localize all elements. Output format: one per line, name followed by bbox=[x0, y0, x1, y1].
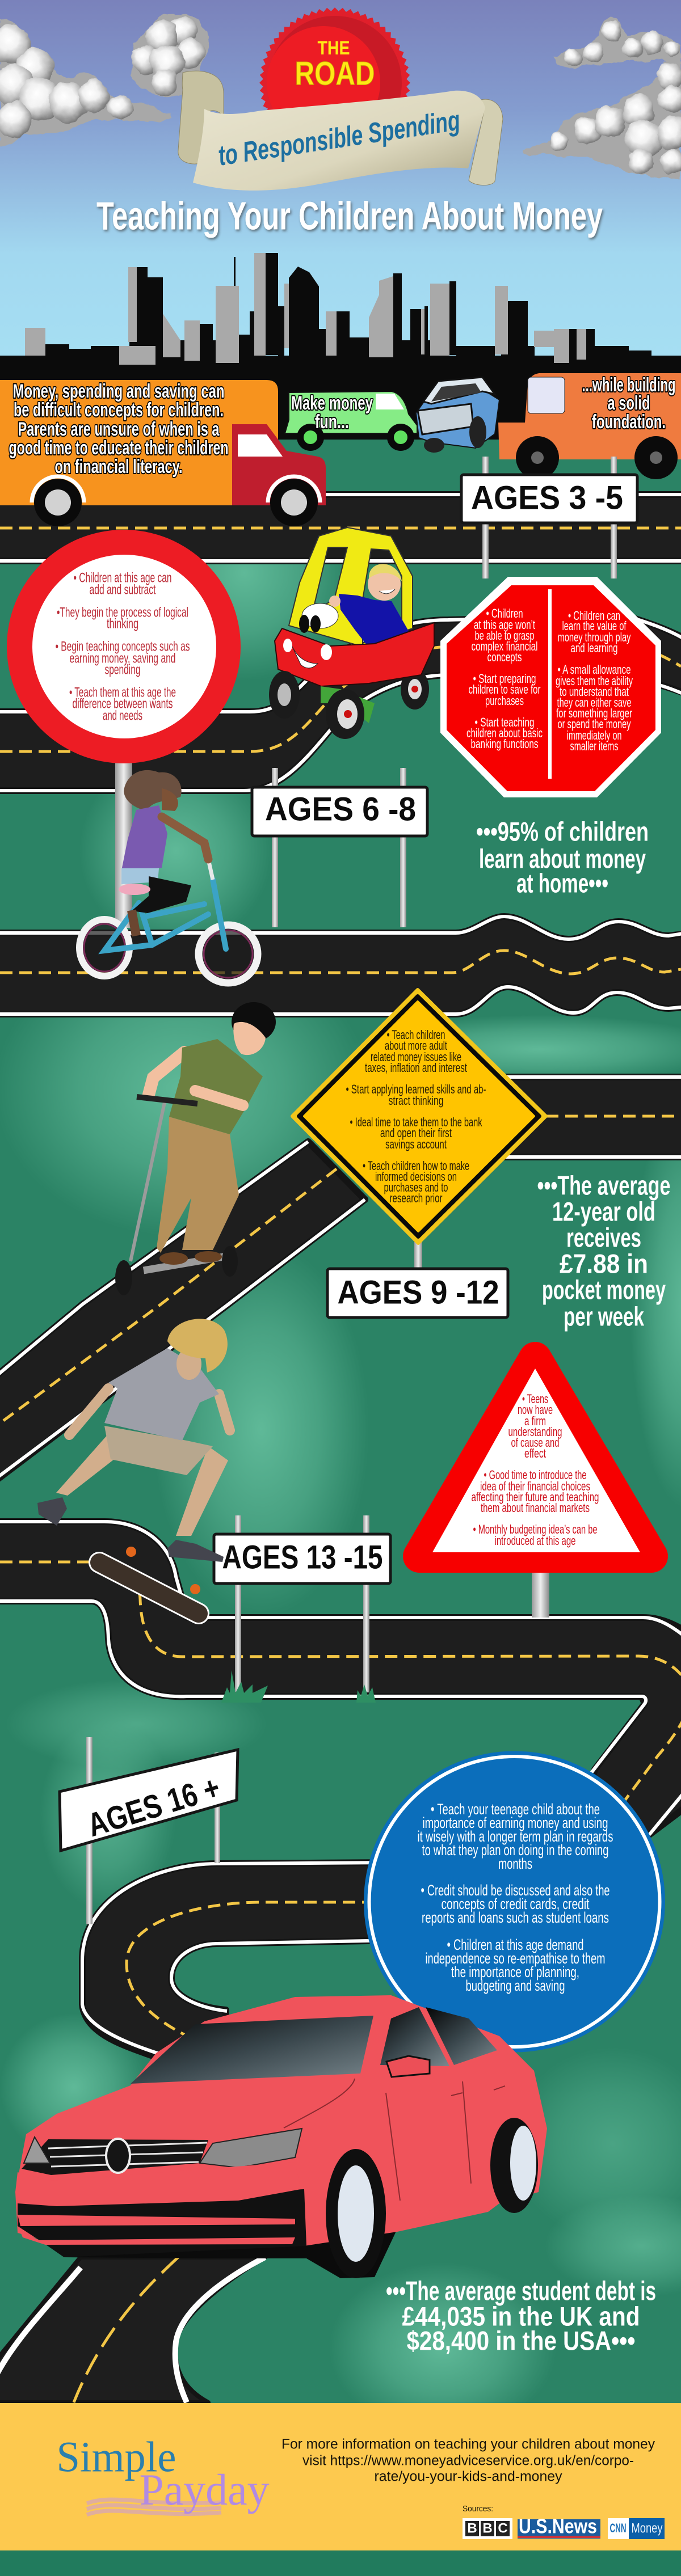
right headlight bbox=[200, 2129, 302, 2168]
divider bbox=[548, 589, 552, 779]
wheel: front right bbox=[326, 689, 364, 739]
octagon left text: complex financial bbox=[471, 639, 538, 653]
octagon left text bbox=[466, 606, 543, 751]
diamond text: purchases and to bbox=[384, 1180, 448, 1194]
road 7: hairpin bbox=[82, 1863, 397, 2076]
road 2: s-curve to right bbox=[0, 615, 681, 791]
wing mirror bbox=[386, 2056, 430, 2077]
word: THE: THE bbox=[318, 37, 350, 59]
logo waves bbox=[87, 2499, 221, 2515]
circle text: spending bbox=[104, 662, 141, 677]
sign board bbox=[214, 1534, 390, 1583]
van window bbox=[528, 377, 565, 413]
circle sign: ages 3-5 bbox=[7, 530, 241, 928]
boy arm bbox=[149, 1052, 184, 1095]
diamond text: stract thinking bbox=[388, 1093, 444, 1108]
circle text: add and subtract bbox=[90, 582, 156, 597]
grille bars bbox=[48, 2143, 207, 2167]
rear rim bbox=[510, 2126, 536, 2201]
triangle text: • Teens bbox=[522, 1392, 548, 1406]
octagon right text: and learning bbox=[571, 641, 617, 655]
circle text: difference between wants bbox=[73, 696, 173, 711]
girl arm bbox=[162, 817, 208, 859]
footer info text: rate/you-your-kids-and-money bbox=[375, 2469, 562, 2485]
road 1: top straight bbox=[0, 495, 681, 561]
child body bbox=[339, 594, 413, 648]
circle text: • Children at this age can bbox=[74, 570, 171, 585]
wheel: front left bbox=[269, 671, 300, 719]
octagon red bbox=[447, 585, 655, 791]
child head bbox=[368, 564, 402, 601]
grille band bbox=[22, 2139, 208, 2175]
sign: ages 13-15 bbox=[214, 1515, 390, 1703]
seal badge bbox=[259, 7, 410, 158]
triangle red bbox=[419, 1358, 651, 1556]
circle text: thinking bbox=[107, 616, 138, 631]
diamond text: • Ideal time to take them to the bank bbox=[350, 1115, 482, 1129]
logo word: Payday: Payday bbox=[140, 2465, 269, 2514]
scooter handlebar bbox=[137, 1097, 197, 1104]
scooter pole and deck bbox=[131, 1100, 230, 1270]
boy face bbox=[176, 1348, 201, 1380]
boy pants bbox=[157, 1117, 239, 1253]
octagon left text: children about basic bbox=[466, 726, 543, 740]
front tyre bbox=[326, 2149, 386, 2278]
side windows bbox=[380, 2007, 497, 2066]
cloud base shapes bbox=[0, 14, 681, 179]
sky bbox=[0, 0, 681, 363]
logo: BBC: C bbox=[498, 2520, 508, 2536]
sign label: AGES 9 -12 bbox=[337, 1274, 499, 1311]
logo: CNN Money: CNN bbox=[609, 2521, 627, 2535]
diamond yellow bbox=[304, 1002, 534, 1231]
diamond text: about more adult bbox=[385, 1038, 447, 1053]
diamond text bbox=[346, 1028, 486, 1205]
footer band bbox=[0, 2403, 681, 2550]
octagon left text: • Children bbox=[486, 606, 523, 620]
diamond text: taxes, inflation and interest bbox=[365, 1061, 467, 1075]
white disc bbox=[32, 555, 216, 738]
post bbox=[115, 760, 132, 928]
diamond text: informed decisions on bbox=[375, 1169, 457, 1184]
sign: ages 6-8 bbox=[252, 768, 427, 927]
rear tyre bbox=[490, 2118, 538, 2213]
girl lower leg bbox=[132, 910, 136, 936]
octagon left text: • Start teaching bbox=[474, 715, 535, 729]
stat: pocket money: per week bbox=[564, 1301, 645, 1331]
boy shirt bbox=[104, 1348, 219, 1441]
octagon left text: children to save for bbox=[469, 682, 541, 696]
bumper upper body bbox=[15, 2162, 301, 2206]
boy face bbox=[233, 1022, 266, 1055]
skyline gray towers bbox=[25, 253, 586, 365]
scroll left roll bbox=[178, 71, 224, 164]
stat: 95 percent: at home••• bbox=[516, 868, 608, 898]
diamond text: • Start applying learned skills and ab- bbox=[346, 1082, 486, 1096]
left headlight bbox=[24, 2137, 50, 2163]
logo: BBC bbox=[463, 2518, 512, 2539]
blue circle text: budgeting and saving bbox=[465, 1977, 565, 1994]
blue circle text: • Teach your teenage child about the bbox=[431, 1801, 600, 1818]
white ring bbox=[369, 1756, 659, 2047]
van wheels bbox=[297, 424, 414, 451]
triangle white bbox=[432, 1369, 640, 1552]
octagon right text: immediately on bbox=[566, 728, 622, 742]
diamond text: related money issues like bbox=[371, 1050, 461, 1064]
scroll subtitle: to Responsible Spending bbox=[216, 104, 462, 172]
girl skirt bbox=[121, 868, 159, 884]
stat: student debt: $28,400 in the USA••• bbox=[406, 2325, 636, 2355]
footer info text: visit https://www.moneyadviceservice.org.uk/en/corpo- bbox=[302, 2453, 634, 2469]
sign board bbox=[327, 1269, 508, 1317]
stat: 95 percent bbox=[476, 816, 649, 898]
van body bbox=[285, 391, 417, 433]
diamond black bbox=[299, 996, 540, 1237]
octagon right text: learn the value of bbox=[562, 619, 627, 633]
octagon right text: • A small allowance bbox=[557, 662, 631, 677]
triangle text: of cause and bbox=[511, 1435, 560, 1450]
diamond outer bbox=[292, 990, 546, 1243]
triangle text: understanding bbox=[508, 1425, 562, 1439]
blue circle text: concepts of credit cards, credit bbox=[442, 1895, 590, 1912]
truck box bbox=[0, 380, 278, 505]
sign label: AGES 6 -8 bbox=[265, 791, 416, 827]
octagon right text: smaller items bbox=[570, 739, 619, 753]
posts bbox=[86, 1737, 220, 1924]
circle text: earning money, saving and bbox=[69, 651, 176, 666]
triangle text: effect bbox=[524, 1446, 547, 1460]
diamond text: • Teach children bbox=[387, 1028, 445, 1042]
truck text: on financial literacy. bbox=[54, 456, 183, 478]
triangle text: them about financial markets bbox=[481, 1501, 590, 1515]
footer info text bbox=[281, 2436, 655, 2485]
diamond sign: ages 9-12 bbox=[292, 990, 546, 1270]
truck window bbox=[238, 434, 283, 457]
vehicle: orange van with text bbox=[498, 373, 681, 479]
triangle text: • Good time to introduce the bbox=[484, 1468, 587, 1482]
road 3: wavy straight bbox=[0, 917, 681, 1014]
blue circle text: • Children at this age demand bbox=[447, 1936, 583, 1953]
triangle text: introduced at this age bbox=[495, 1534, 575, 1548]
logo: CNN Money bbox=[608, 2518, 665, 2539]
circle text bbox=[56, 570, 190, 723]
triangle text: affecting their future and teaching bbox=[471, 1490, 599, 1504]
octagon right text: they can either save bbox=[557, 695, 631, 710]
van text: a solid bbox=[607, 392, 650, 414]
body creases bbox=[284, 2079, 505, 2201]
posts bbox=[482, 457, 617, 578]
logo: US News: U.S.News bbox=[519, 2515, 597, 2538]
blue circle text bbox=[418, 1801, 613, 1994]
car body bbox=[15, 1995, 547, 2246]
van wheels bbox=[516, 436, 678, 479]
truck text: good time to educate their children bbox=[9, 437, 228, 459]
sign: ages 9-12 bbox=[327, 1269, 508, 1317]
red ring bbox=[7, 530, 241, 763]
front bumper bbox=[18, 2189, 306, 2257]
octagon left text: banking functions bbox=[471, 737, 538, 751]
scroll right roll bbox=[469, 99, 503, 185]
octagon right text bbox=[556, 609, 633, 753]
truck text: be difficult concepts for children. bbox=[14, 399, 224, 421]
octagon right text: to understand that bbox=[560, 685, 629, 699]
city skyline bbox=[0, 253, 681, 440]
circle text: • Teach them at this age the bbox=[69, 685, 176, 700]
truck text: Money, spending and saving can bbox=[12, 381, 225, 402]
van text bbox=[582, 374, 675, 433]
bike rear wheel bbox=[79, 919, 129, 976]
stat: pocket money: receives bbox=[566, 1222, 641, 1252]
octagon sign: ages 3-5 bbox=[440, 577, 661, 797]
front rim bbox=[338, 2165, 374, 2262]
boy legs bbox=[56, 1429, 228, 1536]
road 6: lower s-bend bbox=[0, 1522, 681, 1872]
truck grille bbox=[418, 404, 473, 434]
vehicle: orange truck with text bbox=[0, 380, 326, 526]
word: ROAD: ROAD bbox=[295, 55, 375, 92]
sign: ages 16+ bbox=[60, 1737, 238, 1924]
footer panel bbox=[0, 2403, 681, 2576]
sign board bbox=[252, 787, 427, 836]
posts bbox=[272, 768, 406, 927]
sign label: AGES 3 -5 bbox=[471, 479, 623, 516]
scroll body bbox=[193, 91, 485, 191]
child hand bbox=[329, 596, 340, 607]
bumper stripes bbox=[18, 2215, 295, 2245]
wheel: rear bbox=[401, 669, 429, 710]
skyline black bbox=[0, 253, 681, 440]
skateboard bbox=[99, 1547, 200, 1614]
logo: BBC: B bbox=[467, 2520, 477, 2536]
bike frame bbox=[104, 880, 226, 951]
sign label: AGES 13 -15 bbox=[222, 1539, 382, 1576]
truck body bbox=[416, 386, 499, 448]
van body bbox=[498, 373, 681, 459]
windscreen bbox=[131, 2016, 373, 2084]
boy shirt bbox=[169, 1039, 263, 1134]
circle text: •They begin the process of logical bbox=[57, 605, 188, 620]
octagon right text: for something larger bbox=[556, 706, 632, 720]
road 8: exit to footer bbox=[0, 2257, 265, 2402]
logo: BBC: B bbox=[482, 2520, 493, 2536]
red body bbox=[275, 623, 434, 686]
triangle sign: ages 13-15 bbox=[419, 1358, 651, 1618]
child legs bbox=[321, 686, 375, 723]
logo word: Simple: Simple bbox=[57, 2433, 176, 2481]
underbody shadow bbox=[44, 2212, 397, 2278]
octagon left text: • Start preparing bbox=[473, 672, 536, 686]
boy shoes bbox=[159, 1251, 222, 1265]
octagon left text: concepts bbox=[487, 650, 522, 664]
bottom strip bbox=[0, 2550, 681, 2576]
sign board bbox=[461, 475, 637, 523]
octagon left text: be able to grasp bbox=[474, 628, 535, 643]
girl face bbox=[162, 788, 178, 811]
octagon right text: gives them the ability bbox=[556, 674, 633, 688]
road 4: right of diamond bbox=[482, 1077, 681, 1157]
girl on bicycle bbox=[79, 770, 258, 983]
stat: pocket money: £7.88 in bbox=[560, 1248, 648, 1278]
post bbox=[414, 1242, 422, 1270]
girl hair bbox=[124, 770, 182, 811]
logo bbox=[57, 2433, 269, 2515]
grass tufts bbox=[221, 1670, 376, 1703]
footer info text: For more information on teaching your children about money bbox=[281, 2436, 655, 2452]
bike handlebar bbox=[208, 859, 213, 880]
post bbox=[532, 1571, 549, 1618]
truck cab top bbox=[423, 377, 495, 404]
girl torso bbox=[121, 805, 167, 871]
emblem bbox=[106, 2139, 130, 2173]
blue circle text: the importance of planning, bbox=[451, 1963, 579, 1980]
circle text: • Begin teaching concepts such as bbox=[56, 639, 190, 654]
red car bbox=[15, 1995, 547, 2278]
truck wheels bbox=[424, 416, 486, 453]
boy arms bbox=[69, 1388, 230, 1435]
boy forearm bbox=[195, 1091, 243, 1105]
boy on skateboard bbox=[37, 1319, 230, 1614]
octagon left text: at this age won’t bbox=[474, 618, 535, 632]
truck cab bbox=[232, 424, 326, 505]
boy on scooter bbox=[115, 1002, 276, 1295]
diamond text: and open their first bbox=[380, 1126, 452, 1140]
blue circle text: months bbox=[498, 1855, 532, 1872]
yellow cab bbox=[289, 527, 413, 646]
triangle text: a firm bbox=[524, 1414, 546, 1428]
diamond text: • Teach children how to make bbox=[363, 1159, 469, 1173]
sign label: AGES 16 + bbox=[83, 1769, 224, 1844]
stat: pocket money bbox=[537, 1170, 671, 1331]
truck text: Parents are unsure of when is a bbox=[18, 419, 220, 440]
triangle text: idea of their financial choices bbox=[480, 1479, 590, 1493]
truck wheels bbox=[32, 476, 320, 526]
car face bbox=[283, 603, 338, 668]
triangle text: • Monthly budgeting idea’s can be bbox=[473, 1522, 597, 1536]
van text: Make money bbox=[291, 392, 373, 414]
girl leg bbox=[132, 876, 191, 913]
sources label: Sources: bbox=[463, 2504, 493, 2514]
van text: fun... bbox=[315, 411, 349, 433]
octagon left text: purchases bbox=[485, 694, 524, 708]
blue circle sign: ages 16+ bbox=[364, 1751, 665, 2052]
boy shoes bbox=[37, 1497, 224, 1562]
posts bbox=[235, 1515, 369, 1692]
octagon right text: • Children can bbox=[568, 609, 620, 623]
octagon right text: money through play bbox=[557, 630, 631, 644]
circle text: and needs bbox=[103, 708, 142, 723]
bike seat bbox=[119, 884, 150, 895]
diamond text: research prior bbox=[389, 1191, 443, 1205]
scooter wheels bbox=[115, 1246, 238, 1295]
triangle text: now have bbox=[518, 1403, 553, 1417]
van window bbox=[376, 394, 404, 409]
van text bbox=[291, 392, 373, 433]
blue disc bbox=[364, 1751, 665, 2052]
stat: student debt: £44,035 in the UK and bbox=[402, 2301, 640, 2331]
toy car with child bbox=[269, 527, 434, 739]
vehicle: green van with text bbox=[285, 391, 417, 451]
stat: student debt bbox=[386, 2275, 656, 2355]
truck text bbox=[9, 381, 228, 478]
cloud puffs bbox=[0, 16, 681, 174]
octagon right text: or spend the money bbox=[557, 717, 631, 731]
sign board bbox=[60, 1750, 238, 1851]
road 5: diagonal bbox=[0, 1142, 365, 1486]
vehicle: blue truck bbox=[416, 377, 499, 453]
scroll banner bbox=[178, 71, 503, 191]
triangle text bbox=[471, 1392, 599, 1548]
logo: CNN Money: Money bbox=[631, 2520, 663, 2536]
title seal bbox=[259, 7, 410, 158]
clouds bbox=[0, 14, 681, 179]
truck windscreen bbox=[431, 383, 481, 402]
boy hair bbox=[167, 1319, 228, 1373]
boy helmet bbox=[232, 1002, 276, 1042]
diamond text: savings account bbox=[385, 1137, 447, 1151]
bike front wheel bbox=[199, 925, 258, 983]
sign: ages 3-5 bbox=[461, 457, 637, 578]
octagon white bbox=[440, 577, 661, 797]
boy shorts bbox=[104, 1426, 213, 1475]
